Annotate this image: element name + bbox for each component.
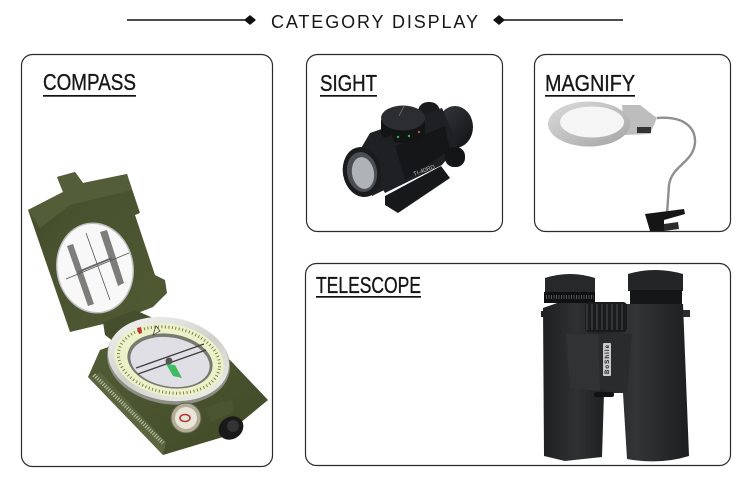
icon: binoculars: BoShile (605, 344, 611, 374)
icon: open lensatic compass (28, 172, 268, 455)
header: category display: CATEGORY DISPLAY (271, 12, 478, 32)
icon: red dot sight (339, 102, 473, 213)
panel: magnify (534, 54, 730, 232)
heading: magnify: MAGNIFY (545, 70, 635, 96)
panel: sight (306, 54, 502, 232)
icon: red dot sight: TI-40RD (413, 164, 437, 178)
header: category display (127, 12, 623, 32)
panel: compass (22, 54, 272, 466)
heading: telescope: TELESCOPE (316, 272, 421, 298)
heading: compass: COMPASS (43, 69, 136, 95)
panel: telescope (306, 264, 730, 466)
icon: clip-on magnifier (548, 102, 695, 231)
heading: sight: SIGHT (320, 70, 377, 96)
icon: binoculars (541, 270, 690, 461)
